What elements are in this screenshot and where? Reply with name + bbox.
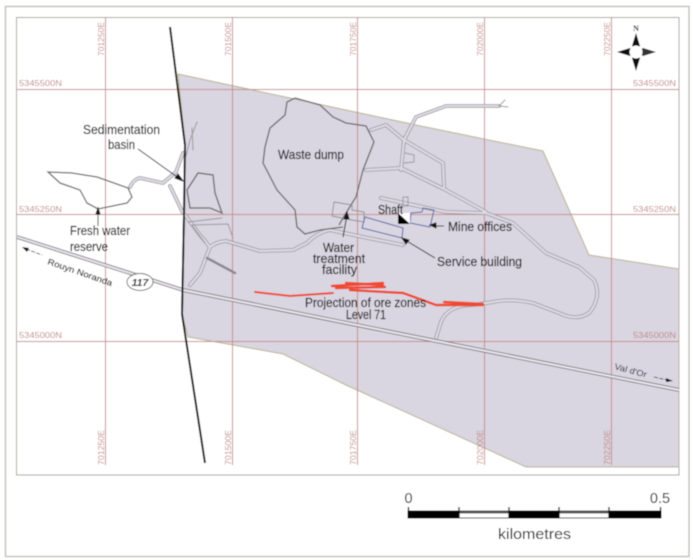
- grid labels: eastings and northings: 701750E: [348, 430, 358, 465]
- grid lines: [17, 18, 679, 465]
- callout arrows: [96, 149, 444, 258]
- north arrow compass: [617, 24, 656, 71]
- label: projection of ore zones: [305, 295, 426, 322]
- scale bar: 0.5: [650, 491, 670, 507]
- highway sign 117: 117: [132, 277, 150, 289]
- grid labels: eastings and northings: 701750E: [348, 22, 358, 56]
- ore zones: [255, 283, 483, 305]
- boundary line: [170, 27, 205, 463]
- highway sign 117: [127, 274, 153, 290]
- label: projection of ore zones: Projection of ore zones: [305, 295, 426, 310]
- label: sedimentation basin: basin: [108, 137, 135, 152]
- label: water treatment facility: facility: [322, 262, 357, 277]
- label: shaft: Shaft: [378, 202, 403, 217]
- water treatment facility outline: [332, 202, 364, 222]
- road direction: Rouyn Noranda: [22, 247, 114, 288]
- north arrow compass: N: [633, 24, 639, 33]
- scale bar: 0: [404, 491, 413, 507]
- label: service building: Service building: [437, 254, 522, 269]
- map frame: [16, 18, 679, 475]
- scale bar: kilometres: [498, 527, 571, 543]
- label: waste dump: Waste dump: [278, 147, 344, 162]
- shaft symbol: [398, 197, 410, 224]
- site roads: [130, 100, 597, 338]
- label: fresh water reserve: reserve: [70, 239, 108, 254]
- label: sedimentation basin: Sedimentation: [83, 122, 160, 137]
- fresh water reserve outline: [48, 172, 132, 209]
- scale bar: [404, 491, 670, 543]
- grid labels: eastings and northings: 702000E: [475, 22, 485, 56]
- label: water treatment facility: [313, 240, 365, 277]
- property area: [178, 74, 679, 467]
- grid labels: eastings and northings: 5345000N: [19, 330, 62, 340]
- grid labels: eastings and northings: 5345500N: [633, 78, 676, 88]
- mine offices building: [410, 208, 434, 227]
- grid labels: eastings and northings: [19, 22, 676, 465]
- grid labels: eastings and northings: 701500E: [223, 22, 233, 56]
- label: fresh water reserve: Fresh water: [70, 223, 131, 238]
- grid labels: eastings and northings: 701250E: [96, 22, 106, 56]
- highway 117: [17, 237, 679, 390]
- road direction: Rouyn Noranda: Rouyn Noranda: [46, 256, 114, 288]
- service building: [362, 217, 403, 238]
- grid labels: eastings and northings: 5345250N: [633, 204, 676, 214]
- label: water treatment facility: treatment: [313, 251, 365, 266]
- label: fresh water reserve: [70, 223, 131, 254]
- label: projection of ore zones: Level 71: [346, 307, 386, 322]
- label: water treatment facility: Water: [323, 240, 355, 255]
- label: mine offices: Mine offices: [448, 219, 512, 234]
- road direction: Val d'Or: Val d'Or: [613, 361, 648, 380]
- grid labels: eastings and northings: 5345000N: [633, 330, 676, 340]
- grid labels: eastings and northings: 702250E: [602, 430, 612, 465]
- grid labels: eastings and northings: 701250E: [96, 430, 106, 465]
- grid labels: eastings and northings: 702250E: [602, 22, 612, 56]
- road direction: Val d'Or: [613, 361, 673, 382]
- label: sedimentation basin: [83, 122, 160, 152]
- grid labels: eastings and northings: 701500E: [223, 430, 233, 465]
- grid labels: eastings and northings: 702000E: [475, 430, 485, 465]
- sedimentation basin outline: [187, 173, 222, 213]
- waste dump outline: [263, 98, 374, 234]
- grid labels: eastings and northings: 5345500N: [19, 78, 62, 88]
- grid labels: eastings and northings: 5345250N: [19, 204, 62, 214]
